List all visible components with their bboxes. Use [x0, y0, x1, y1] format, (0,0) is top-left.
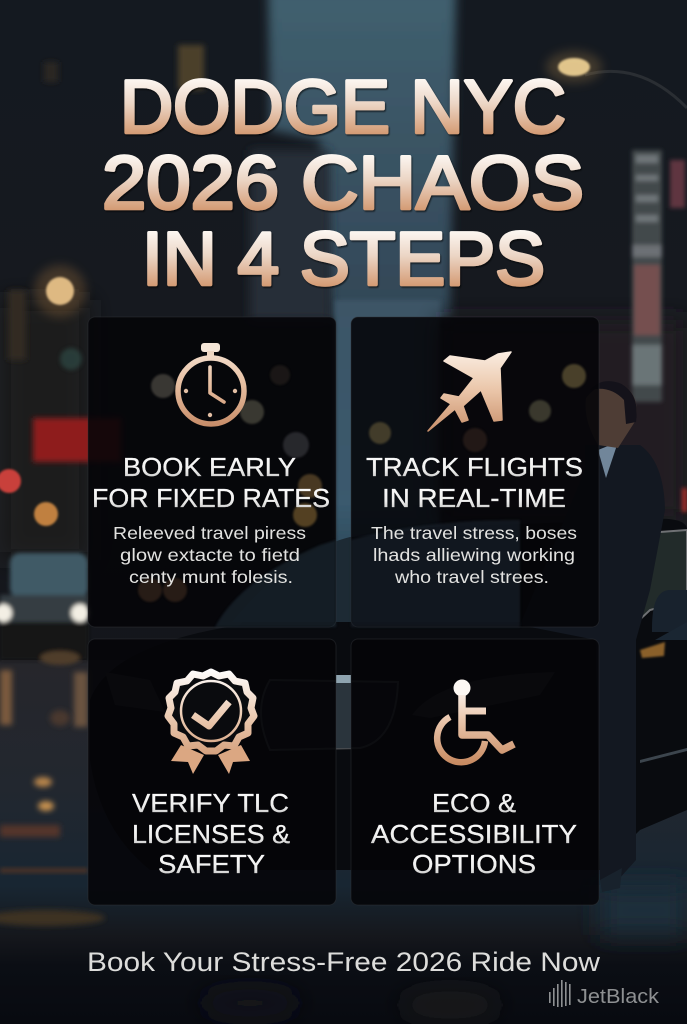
- panel: eco and accessibility: [351, 639, 599, 905]
- road surface: [0, 660, 687, 1024]
- man in dark suit: [520, 381, 665, 892]
- heading: verify tlc: VERIFY TLC: [132, 788, 289, 818]
- heading: book early: [92, 452, 330, 513]
- heading: eco and accessibility: ECO &: [432, 788, 516, 818]
- neon vertical sign: [632, 150, 687, 512]
- panel: track flights: [351, 317, 599, 627]
- panel bokeh lights: [138, 365, 336, 627]
- logo wordmark: JetBlack: [577, 986, 660, 1008]
- street lamp top right: [546, 51, 687, 108]
- icon: rosette badge: [168, 672, 254, 774]
- title: [102, 64, 584, 300]
- heading: eco and accessibility: [371, 788, 577, 879]
- black car: [90, 519, 687, 870]
- heading: verify tlc: LICENSES &: [132, 819, 290, 849]
- heading: eco and accessibility: ACCESSIBILITY: [371, 819, 577, 849]
- icon: airplane: [428, 352, 511, 431]
- logo bars: [549, 980, 571, 1007]
- description: track flights: The travel stress, boses: [371, 523, 577, 543]
- panel bokeh lights: [351, 364, 586, 627]
- heading: book early: FOR FIXED RATES: [92, 483, 330, 513]
- heading: verify tlc: [132, 788, 290, 879]
- panel: book early: [88, 317, 336, 627]
- title: DODGE NYC: [120, 64, 566, 148]
- icon: stopwatch: [178, 343, 244, 424]
- heading: verify tlc: SAFETY: [158, 849, 265, 879]
- description: book early: Releeved travel piress: [113, 523, 306, 543]
- heading: eco and accessibility: OPTIONS: [412, 849, 536, 879]
- panel: verify tlc: [88, 639, 336, 905]
- left background car: [0, 553, 89, 665]
- description: book early: centy munt folesis.: [129, 567, 293, 587]
- heading: track flights: TRACK FLIGHTS: [366, 452, 583, 482]
- left street lights and bokeh: [0, 265, 121, 526]
- title: 2026 CHAOS: [102, 140, 584, 224]
- description: book early: glow extacte to fietd: [120, 545, 300, 565]
- title: IN 4 STEPS: [142, 216, 545, 300]
- heading: track flights: IN REAL-TIME: [382, 483, 566, 513]
- call to action: Book Your Stress-Free 2026 Ride Now: [87, 947, 601, 977]
- logo: JetBlack: [549, 980, 660, 1008]
- icon: wheelchair: [437, 680, 514, 762]
- heading: book early: BOOK EARLY: [123, 452, 296, 482]
- description: track flights: who travel strees.: [394, 567, 549, 587]
- heading: track flights: [366, 452, 583, 513]
- description: track flights: lhads alliewing working: [373, 545, 575, 565]
